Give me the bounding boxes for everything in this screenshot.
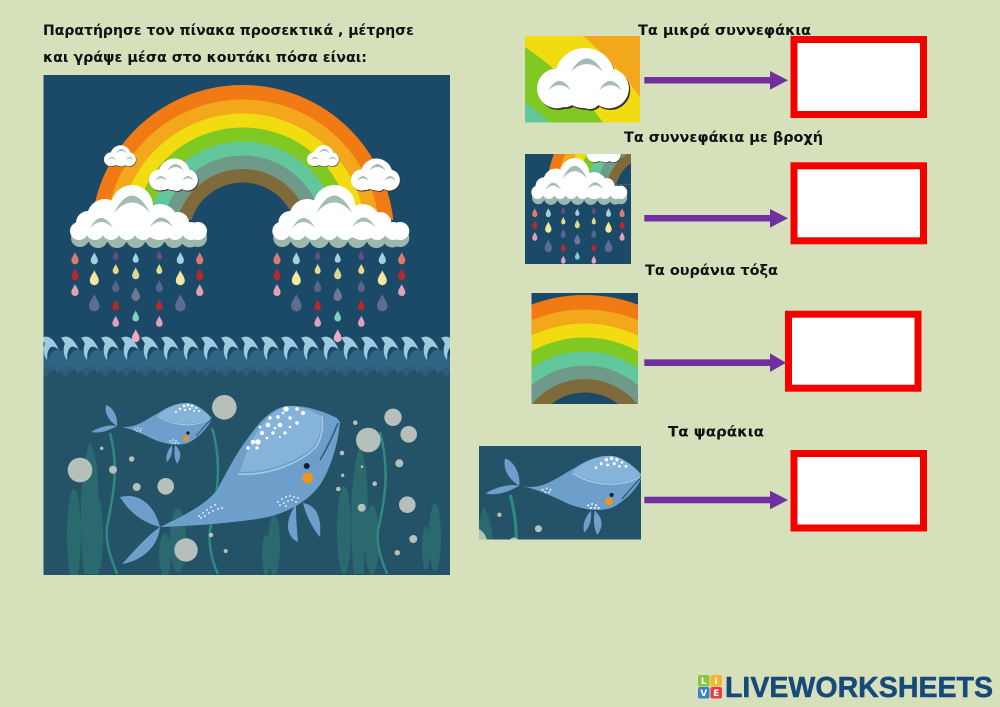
small cloud 2 xyxy=(149,158,199,192)
arrow 4 xyxy=(644,491,788,509)
bubbles xyxy=(68,395,417,562)
seaweed xyxy=(67,428,441,581)
answer box 4 xyxy=(794,454,924,528)
thumbnail: whale xyxy=(479,446,641,540)
arrow 2 xyxy=(644,209,788,228)
arrow 1 xyxy=(644,71,788,90)
answer box 2 xyxy=(794,166,924,241)
label: small clouds: Τα μικρά συννεφάκια xyxy=(638,23,811,39)
icon: live blocks: V xyxy=(700,689,707,699)
sky background xyxy=(44,75,450,367)
answer box 3 xyxy=(788,314,918,388)
icon: live blocks: L xyxy=(701,677,707,687)
big whale xyxy=(120,406,340,564)
logo: liveworksheets xyxy=(698,672,993,704)
thumbnail: rain cloud xyxy=(525,154,631,264)
label: fish: Τα ψαράκια xyxy=(668,424,764,440)
thumbnail: small cloud xyxy=(525,36,640,122)
thumbnail: rainbow xyxy=(532,293,638,404)
label: clouds with rain: Τα συννεφάκια με βροχή xyxy=(624,130,823,146)
rain drops left xyxy=(71,251,203,342)
waves xyxy=(44,335,450,380)
icon: live blocks xyxy=(698,675,722,699)
icon: live blocks: I xyxy=(715,677,718,687)
small cloud 3 xyxy=(307,145,339,167)
small whale xyxy=(91,403,212,464)
small cloud 4 xyxy=(351,158,401,192)
rain drops right xyxy=(273,251,405,342)
large cloud left xyxy=(70,185,207,248)
small cloud 1 xyxy=(104,145,136,167)
sea background xyxy=(44,362,450,575)
panel: main picture with rainbow and whales xyxy=(44,75,450,581)
rainbow xyxy=(91,85,394,388)
heading: instructions: και γράψε μέσα στο κουτάκι πόσα είναι: xyxy=(43,50,367,66)
arrow 3 xyxy=(644,353,786,372)
heading: instructions xyxy=(43,23,414,66)
wordmark: LIVEWORKSHEETS xyxy=(725,672,993,704)
answer box 1 xyxy=(794,40,924,114)
large cloud right xyxy=(272,185,409,248)
heading: instructions: Παρατήρησε τον πίνακα προσεκτικά , μέτρησε xyxy=(43,23,414,39)
label: rainbows: Τα ουράνια τόξα xyxy=(645,263,778,279)
icon: live blocks: E xyxy=(713,689,719,699)
